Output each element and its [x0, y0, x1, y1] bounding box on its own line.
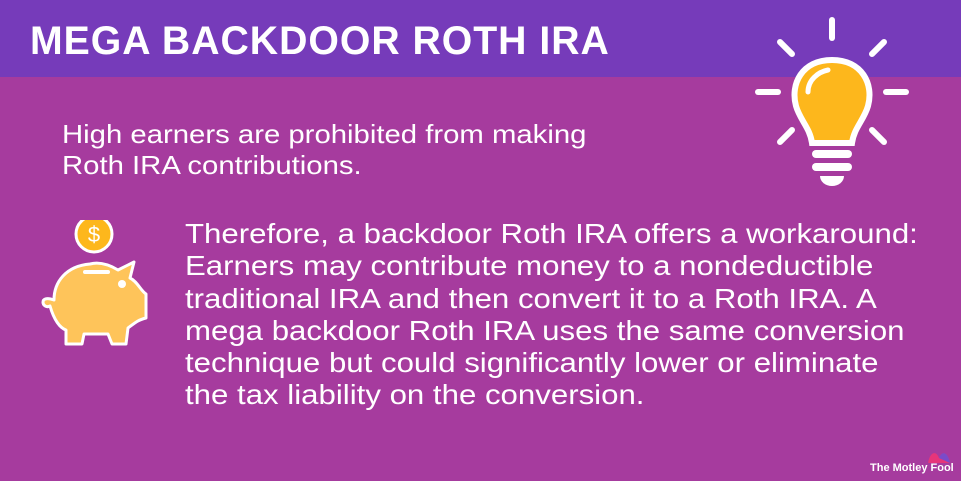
- icon: light bulb: [755, 17, 909, 186]
- logo: The Motley Fool: [870, 453, 954, 474]
- icon: piggy bank with coin: [42, 220, 148, 346]
- header band: [0, 0, 961, 77]
- icon: piggy bank with coin: $: [88, 222, 100, 247]
- title: MEGA BACKDOOR ROTH IRA: [30, 19, 610, 63]
- text block: explanation: mega backdoor Roth IRA uses the same conversion: [185, 315, 905, 346]
- text block: explanation: [185, 218, 918, 410]
- text block: intro: Roth IRA contributions.: [62, 150, 362, 180]
- text block: explanation: the tax liability on the conversion.: [185, 379, 644, 410]
- text block: intro: High earners are prohibited from making: [62, 119, 586, 149]
- text block: explanation: traditional IRA and then convert it to a Roth IRA. A: [185, 283, 877, 314]
- text block: intro: [62, 119, 586, 180]
- text block: explanation: Therefore, a backdoor Roth IRA offers a workaround:: [185, 218, 918, 249]
- text block: explanation: technique but could significantly lower or eliminate: [185, 347, 879, 378]
- logo: The Motley Fool: The Motley Fool: [870, 462, 954, 474]
- text block: explanation: Earners may contribute money to a nondeductible: [185, 250, 873, 281]
